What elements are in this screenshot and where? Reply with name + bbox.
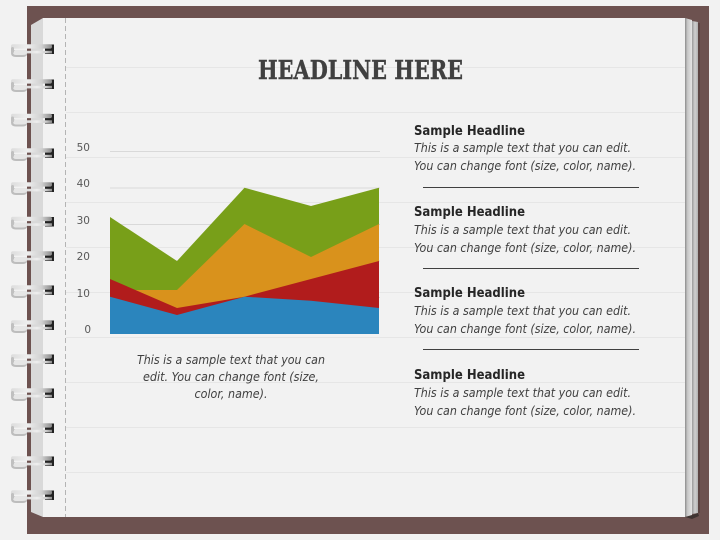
text block 4: This is a sample text that you can edit. (414, 386, 631, 400)
y axis labels: 40 (77, 178, 90, 190)
text block 2: This is a sample text that you can edit. (414, 223, 631, 237)
chart caption: This is a sample text that you can (137, 353, 325, 367)
spiral binding rings (11, 44, 54, 503)
text block 4: Sample Headline (414, 368, 525, 383)
series: orange (133, 224, 379, 334)
series: blue (110, 297, 379, 334)
series: red (110, 261, 379, 334)
text block 2: Sample Headline (414, 205, 525, 220)
text block 1: You can change font (size, color, name). (414, 159, 636, 173)
y axis labels: 20 (77, 251, 90, 263)
chart caption: edit. You can change font (size, (143, 370, 319, 384)
gridlines (110, 152, 380, 298)
text block 2: You can change font (size, color, name). (414, 241, 636, 255)
ruled page lines (66, 68, 685, 472)
text block 1: Sample Headline (414, 124, 525, 139)
text block 3: Sample Headline (414, 286, 525, 301)
back pages (685, 18, 700, 519)
chart caption (137, 353, 325, 401)
chart caption: color, name). (194, 387, 268, 401)
margin dashed line (64, 18, 66, 517)
text block 4: You can change font (size, color, name). (414, 404, 636, 418)
title: HEADLINE HERE (258, 56, 463, 86)
y axis labels: 50 (77, 142, 90, 154)
text block 3: This is a sample text that you can edit. (414, 304, 631, 318)
text block 4 (414, 368, 636, 418)
y axis labels: 0 (84, 324, 91, 336)
text block 1: This is a sample text that you can edit. (414, 141, 631, 155)
y axis labels: 30 (77, 215, 90, 227)
text block 2 (414, 205, 636, 255)
text block 1 (414, 124, 636, 173)
y axis labels (77, 142, 91, 336)
divider 2 (423, 268, 639, 270)
divider 1 (423, 186, 639, 188)
binding strip (31, 18, 43, 517)
text block 3 (414, 286, 636, 336)
area chart (77, 142, 380, 336)
y axis labels: 10 (77, 288, 90, 300)
divider 3 (423, 348, 639, 350)
series: green (110, 188, 379, 334)
text block 3: You can change font (size, color, name). (414, 322, 636, 336)
